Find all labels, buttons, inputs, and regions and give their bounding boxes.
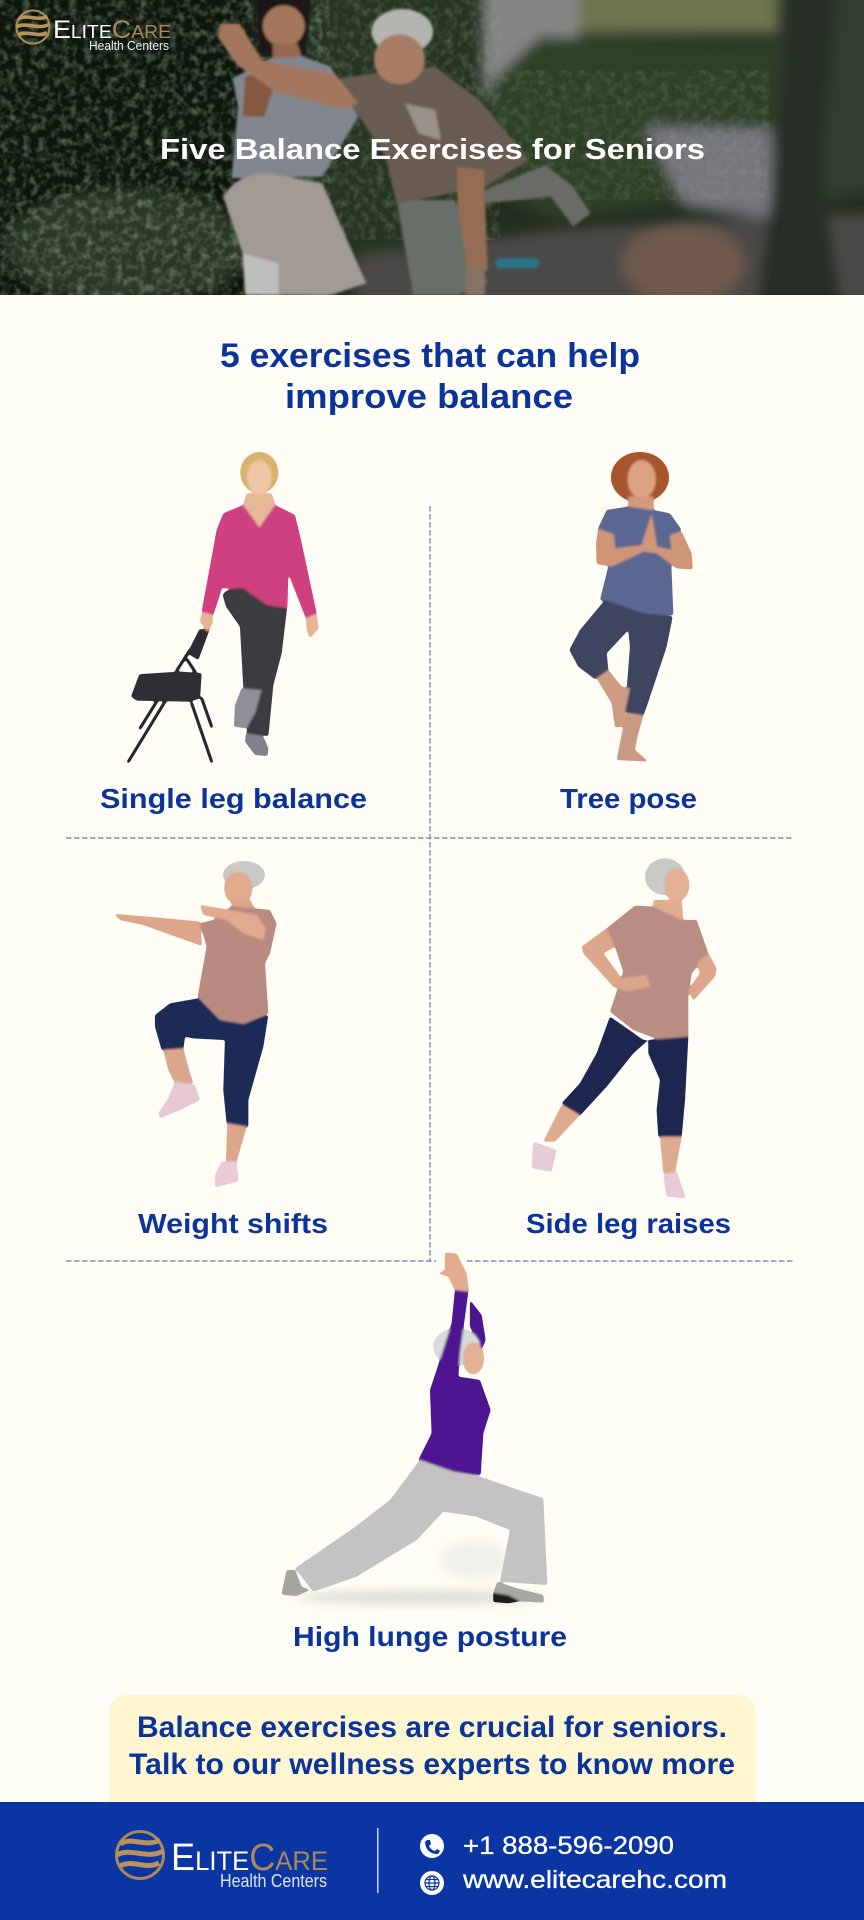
icon: logo emblem xyxy=(16,10,50,44)
callout panel: Talk to our wellness experts to know more xyxy=(129,1748,735,1781)
website: www.elitecarehc.com xyxy=(462,1866,727,1894)
footer logo tagline: Health Centers xyxy=(220,1871,327,1891)
figure shadow xyxy=(297,1540,543,1605)
icon: footer logo emblem xyxy=(116,1832,164,1878)
labels: Weight shifts xyxy=(138,1208,328,1239)
labels: Tree pose xyxy=(560,783,697,814)
figure: weight shifts xyxy=(114,861,277,1187)
figure: single leg balance xyxy=(128,452,319,762)
header photo banner xyxy=(0,0,864,313)
foliage texture xyxy=(0,0,330,295)
figure: side leg raises xyxy=(532,858,717,1198)
icon: phone xyxy=(420,1834,444,1858)
logo wordmark: ELITECARE xyxy=(53,16,171,44)
labels: Single leg balance xyxy=(100,783,367,814)
callout panel xyxy=(109,1695,756,1802)
dashed grid lines xyxy=(66,506,793,1262)
callout panel: Balance exercises are crucial for seniors. xyxy=(137,1711,727,1744)
labels xyxy=(100,783,731,1652)
divider xyxy=(377,1828,378,1893)
logo tagline: Health Centers xyxy=(89,38,169,53)
heading xyxy=(220,337,640,416)
figure: tree pose xyxy=(569,452,693,762)
labels: High lunge posture xyxy=(293,1621,567,1652)
phone number: +1 888-596-2090 xyxy=(463,1832,674,1860)
header logo xyxy=(16,10,171,53)
icon: globe xyxy=(420,1871,444,1895)
title: Five Balance Exercises for Seniors xyxy=(160,134,705,166)
figure: high lunge posture xyxy=(282,1253,547,1605)
lunging woman xyxy=(282,1253,547,1603)
footer bar xyxy=(0,1802,864,1920)
heading: improve balance xyxy=(285,378,573,416)
heading: 5 exercises that can help xyxy=(220,337,640,375)
photo: trainer and senior exercising xyxy=(218,0,591,295)
labels: Side leg raises xyxy=(526,1208,731,1239)
footer logo wordmark: ELITECARE xyxy=(171,1837,328,1879)
icon: chair xyxy=(128,629,212,762)
